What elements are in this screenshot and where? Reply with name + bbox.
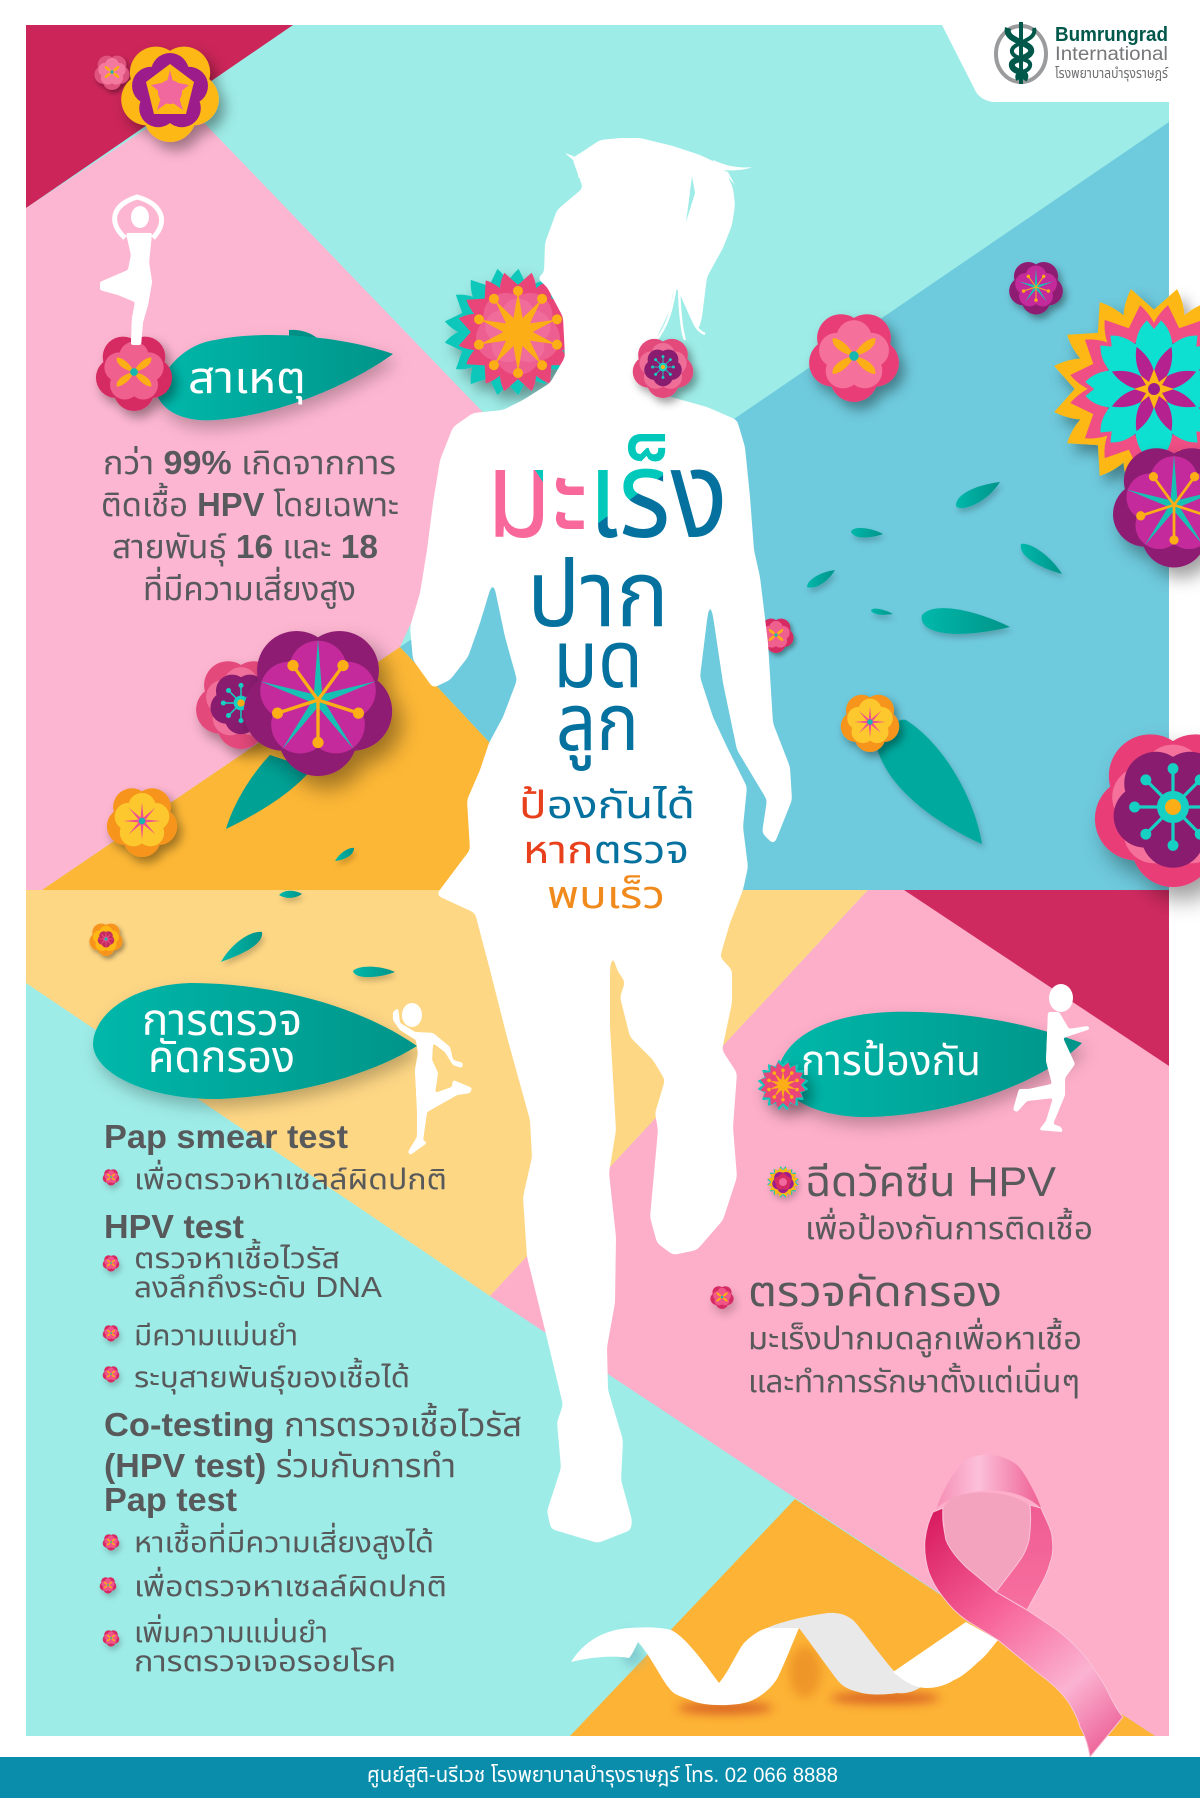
text block: screening list: ลงลึกถึงระดับ DNA xyxy=(134,1272,383,1304)
title: ป้องกันได้ xyxy=(519,785,695,827)
banner: causes xyxy=(157,335,393,420)
text block: screening list: Pap test xyxy=(104,1481,237,1518)
title: มะเร็ง xyxy=(486,427,728,563)
text block: prevention: และทำการรักษาตั้งแต่เนิ่นๆ xyxy=(748,1362,1080,1399)
title: มด xyxy=(553,615,643,704)
text block: causes: ที่มีความเสี่ยงสูง xyxy=(143,566,356,609)
flower: small purple right xyxy=(1009,262,1063,314)
silhouette: running woman xyxy=(410,138,792,1543)
banner: prevention xyxy=(778,1012,1082,1117)
banner leaf: causes xyxy=(289,330,318,339)
logo: โรงพยาบาลบำรุงราษฎร์ xyxy=(1055,65,1169,82)
footer bar xyxy=(0,1757,1200,1798)
text block: screening list: เพิ่มความแม่นยำ xyxy=(134,1614,328,1649)
flower: orange right xyxy=(841,695,899,752)
background: pink lower right panel xyxy=(490,890,1169,1736)
banner: screening: การตรวจ xyxy=(142,996,302,1045)
text block: prevention xyxy=(748,1158,1093,1399)
title: ปาก xyxy=(527,544,669,646)
ribbon: white waving tail xyxy=(571,1613,998,1714)
text block: prevention: ฉีดวัคซีน HPV xyxy=(805,1158,1056,1205)
text block: screening list: มีความแม่นยำ xyxy=(134,1320,298,1352)
banner: prevention: การป้องกัน xyxy=(801,1037,981,1084)
banner: screening xyxy=(93,983,417,1099)
flower: top left small pink xyxy=(94,56,130,90)
leaf: large under orange flower xyxy=(877,720,982,844)
icon: screening bullet flower xyxy=(710,1286,734,1309)
text block: screening list: ตรวจหาเชื้อไวรัส xyxy=(134,1238,340,1275)
text block: screening list: ระบุสายพันธุ์ของเชื้อได้ xyxy=(134,1357,410,1394)
icon: vaccine bullet flower xyxy=(763,1162,803,1202)
flower: neck small xyxy=(633,339,693,398)
flower: small pink behind purple xyxy=(196,661,286,749)
logo: International xyxy=(1055,44,1168,65)
ribbon: pink awareness ribbon xyxy=(925,1455,1123,1757)
flower: top left yellow purple xyxy=(121,47,219,142)
text block: causes: สายพันธุ์ 16 และ 18 xyxy=(112,528,378,567)
title: ลูก xyxy=(556,678,639,771)
title: หาก ตรวจ xyxy=(523,830,689,872)
icon: side runner xyxy=(1013,984,1090,1132)
text block: prevention: มะเร็งปากมดลูกเพื่อหาเชื้อ xyxy=(748,1317,1082,1357)
icons: list bullets xyxy=(100,1169,119,1646)
text block: screening list: Co-testing การตรวจเชื้อไวรัส xyxy=(104,1402,522,1443)
text block: causes: ติดเชื้อ HPV โดยเฉพาะ xyxy=(101,482,399,523)
text block: screening list xyxy=(104,1118,522,1678)
text block: causes: กว่า 99% เกิดจากการ xyxy=(103,444,396,481)
text block: screening list: เพื่อตรวจหาเซลล์ผิดปกติ xyxy=(134,1159,447,1196)
logo: Bumrungrad xyxy=(1055,24,1168,46)
leaves scatter blue xyxy=(807,482,1062,634)
text block: screening list: (HPV test) ร่วมกับการทำ xyxy=(104,1447,456,1484)
title: พบเร็ว xyxy=(547,875,665,917)
text block: screening list: Pap smear test xyxy=(104,1118,348,1155)
icon: jumping runner xyxy=(393,1003,472,1155)
text block: prevention: เพื่อป้องกันการติดเชื้อ xyxy=(805,1207,1093,1246)
flower: purple right xyxy=(1113,448,1200,568)
logo tab xyxy=(942,25,1169,102)
background: crimson corner top left xyxy=(26,25,293,208)
flower: causes banner pink xyxy=(96,337,172,411)
text block: screening list: หาเชื้อที่มีความเสี่ยงสูงได้ xyxy=(134,1522,434,1560)
flower: big pink star behind shoulder xyxy=(426,250,590,414)
background: pale yellow panel xyxy=(26,890,868,1296)
leaves scatter left xyxy=(221,848,395,977)
flower: orange bottom left xyxy=(107,788,177,857)
leaf under pink star flower xyxy=(226,755,312,829)
background: orange bottom triangle xyxy=(570,1499,1155,1736)
banner: causes: สาเหตุ xyxy=(188,354,306,405)
text block: screening list: การตรวจเจอรอยโรค xyxy=(134,1646,396,1678)
flower: teal mandala xyxy=(1046,281,1200,497)
icon: yoga pose figure xyxy=(100,197,162,345)
flower: pink cross right xyxy=(809,314,899,402)
background: pink left panel xyxy=(26,103,500,890)
flower: big purple left xyxy=(244,631,392,776)
flower: prevention banner xyxy=(750,1052,816,1118)
banner: screening: คัดกรอง xyxy=(148,1033,295,1082)
flower: tiny pink at arm xyxy=(758,619,794,653)
footer text: ศูนย์สูติ-นรีเวช โรงพยาบาลบำรุงราษฎร์ โทร. 02 066 8888 xyxy=(367,1764,838,1788)
text block: prevention: ตรวจคัดกรอง xyxy=(748,1268,1002,1315)
background: orange left panel xyxy=(42,647,600,890)
background: blue right panel xyxy=(400,122,1169,890)
logo xyxy=(996,22,1169,84)
text block: screening list: HPV test xyxy=(104,1208,244,1245)
text block: screening list: เพื่อตรวจหาเซลล์ผิดปกติ xyxy=(134,1566,447,1603)
background: crimson corner right xyxy=(904,890,1169,1066)
text block: causes xyxy=(101,444,399,609)
title xyxy=(486,427,728,917)
flower: tiny orange xyxy=(89,924,123,956)
flower: large pink purple right xyxy=(1095,734,1200,887)
